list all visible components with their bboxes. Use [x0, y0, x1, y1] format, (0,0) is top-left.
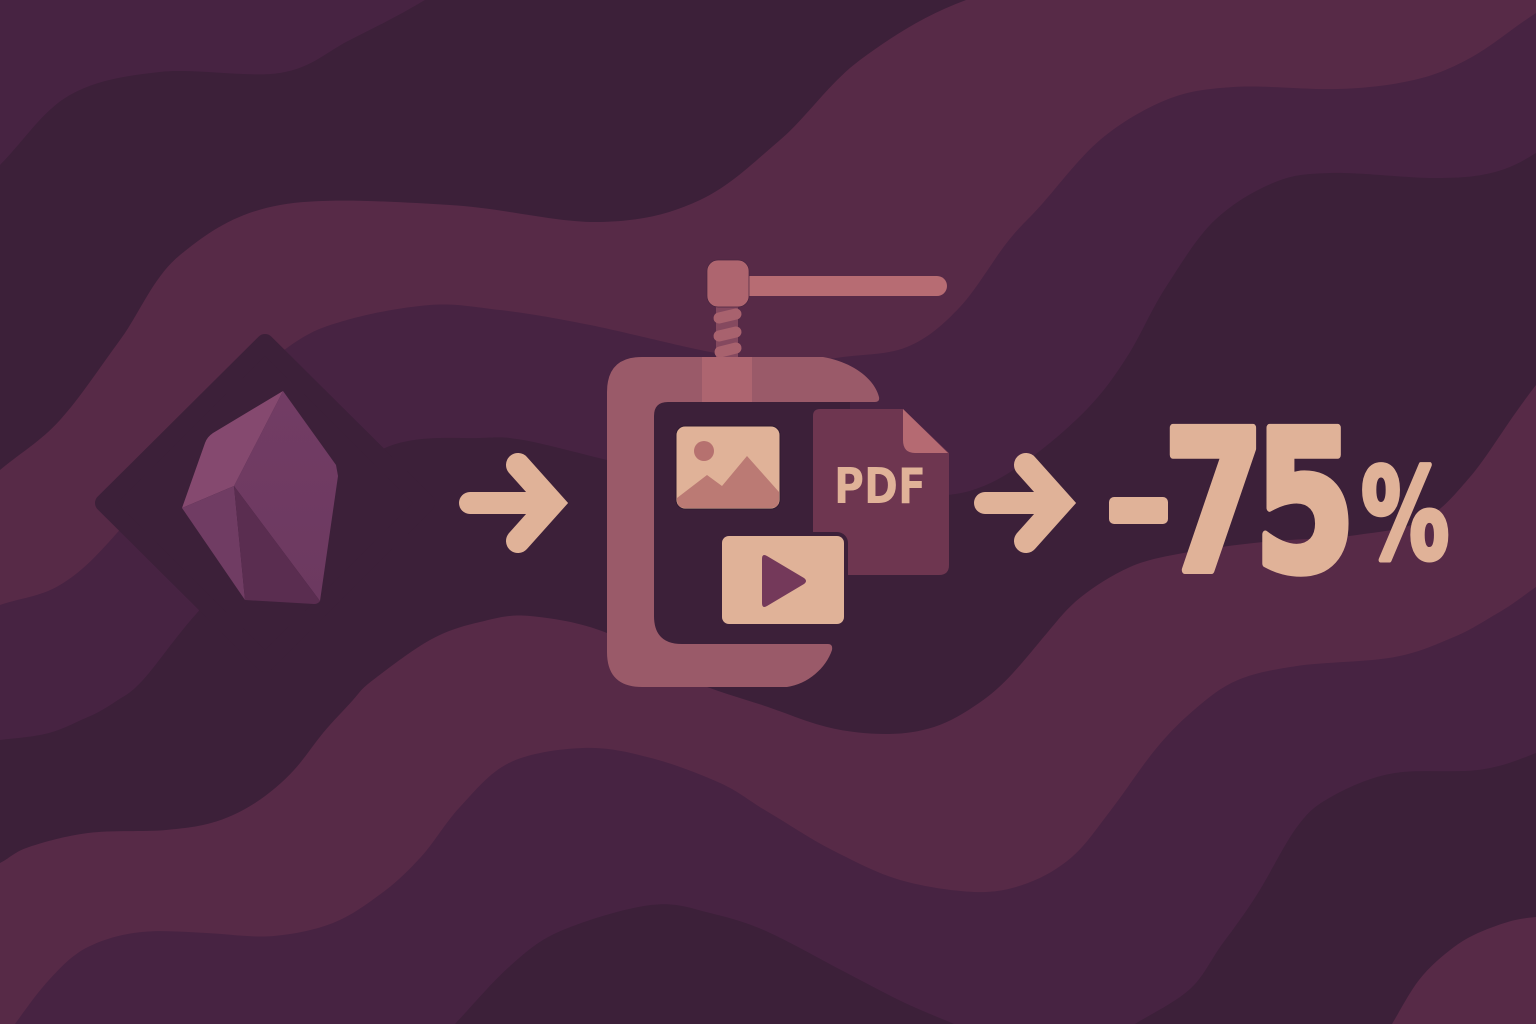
icon: PDF document [813, 409, 949, 575]
clamp handle knob [707, 260, 749, 307]
percent sign: % [1361, 441, 1449, 588]
gem lower left face [182, 486, 245, 600]
clamp handle bar [740, 276, 947, 296]
panel: dark diamond behind gem [104, 343, 426, 663]
image mountains [677, 456, 779, 508]
icon: clamp [607, 260, 947, 687]
arrow: gem to clamp [470, 465, 552, 541]
clamp screw [716, 305, 738, 359]
result: minus 75 percent: 5 [1254, 389, 1356, 616]
gem main face [234, 391, 338, 601]
image sun [694, 441, 714, 461]
icon: video card [718, 532, 848, 628]
icon: obsidian gem [182, 391, 338, 604]
gem bottom face [234, 486, 320, 604]
clamp centre block [702, 357, 752, 402]
gem light face [182, 391, 283, 508]
PDF label: PDF [834, 458, 926, 515]
clamp interior [650, 398, 850, 648]
play triangle [762, 555, 806, 607]
clamp frame [607, 357, 879, 687]
icon: image card [676, 426, 780, 509]
minus sign [1109, 497, 1168, 524]
result: minus 75 percent [1109, 389, 1449, 616]
document fold [903, 409, 948, 453]
arrow: clamp to result [985, 465, 1060, 541]
digits 75: 7 [1163, 389, 1265, 616]
